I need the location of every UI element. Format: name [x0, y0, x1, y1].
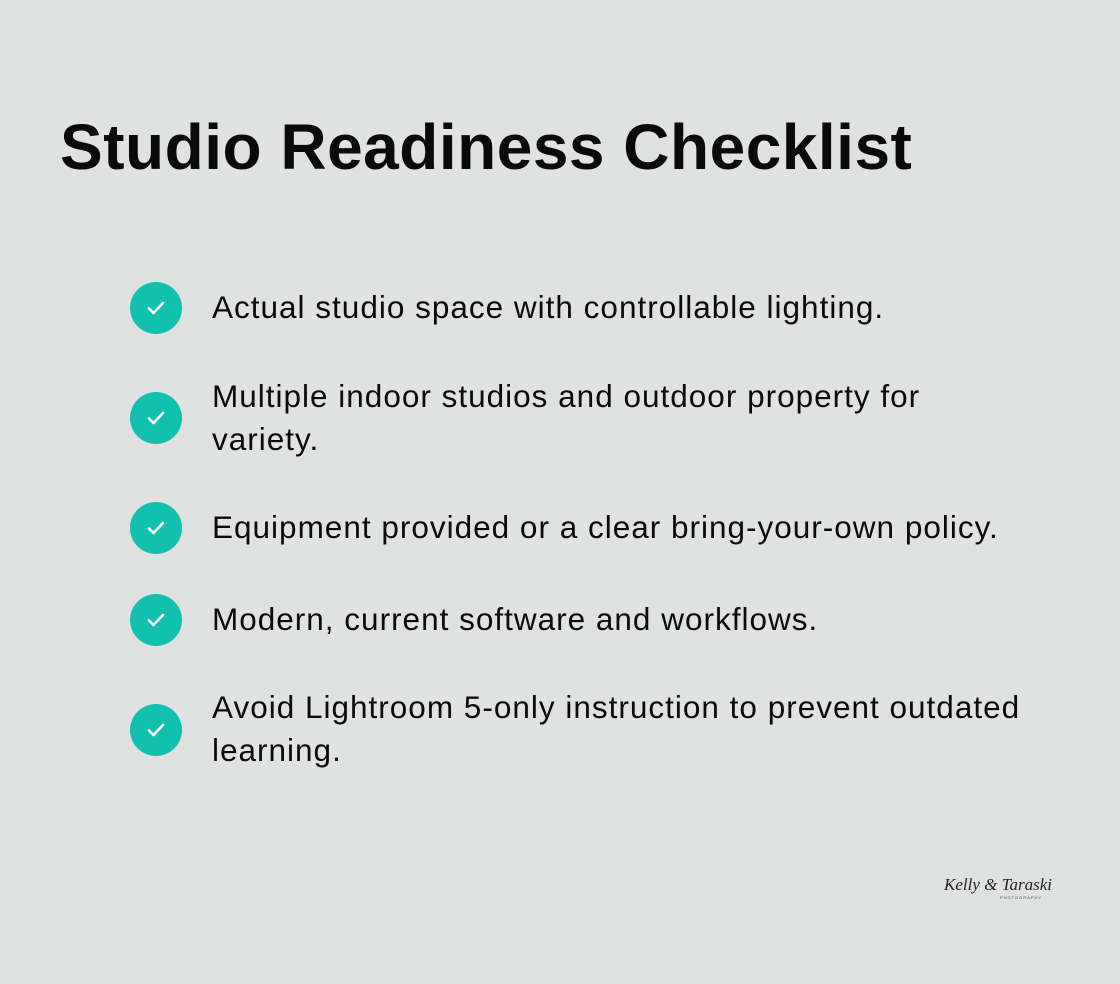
checklist item 1: [130, 282, 884, 334]
text: [212, 378, 920, 457]
icon: check: [130, 392, 182, 444]
icon: check: [130, 282, 182, 334]
text: Equipment provided or a clear bring-your-own policy.: [212, 509, 999, 545]
checklist item 5: [130, 689, 1020, 768]
text: Actual studio space with controllable lighting.: [212, 289, 884, 325]
checklist item 3: [130, 502, 999, 554]
icon: check: [130, 704, 182, 756]
text: variety.: [212, 421, 319, 457]
text: Avoid Lightroom 5-only instruction to prevent outdated: [212, 689, 1020, 725]
text: [212, 689, 1020, 768]
text: learning.: [212, 732, 342, 768]
checklist item 4: [130, 594, 818, 646]
text: Multiple indoor studios and outdoor property for: [212, 378, 920, 414]
icon: check: [130, 594, 182, 646]
title: Studio Readiness Checklist: [60, 111, 912, 183]
checklist item 2: [130, 378, 920, 457]
icon: check: [130, 502, 182, 554]
logo signature: PHOTOGRAPHY: [1000, 895, 1042, 900]
logo signature: Kelly & Taraski: [943, 875, 1052, 894]
text: Modern, current software and workflows.: [212, 601, 818, 637]
